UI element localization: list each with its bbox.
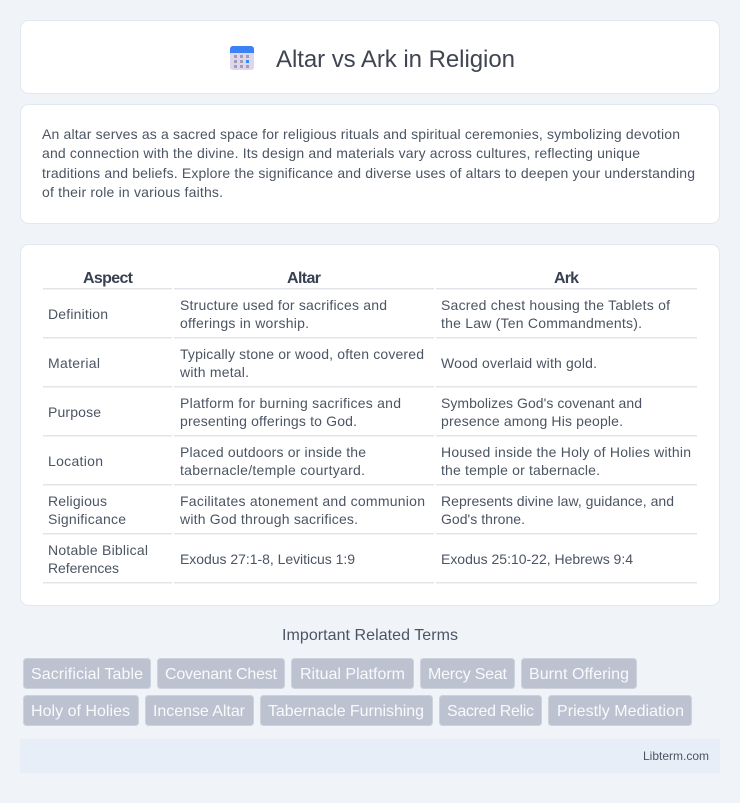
intro text: traditions and beliefs. Explore the significance and diverse uses of altars to deepen your understanding [42, 165, 695, 181]
tag [146, 696, 254, 726]
row: religious significance: Religious [48, 493, 107, 509]
row: location: the temple or tabernacle. [441, 462, 600, 478]
table [43, 270, 697, 584]
tag: Covenant Chest [165, 666, 278, 683]
row: location: tabernacle/temple courtyard. [180, 462, 365, 478]
row: location: Location [48, 453, 103, 469]
related terms tags [24, 658, 692, 726]
tag [548, 696, 692, 726]
row: purpose: Purpose [48, 404, 101, 420]
row: definition: Sacred chest housing the Tablets of [441, 297, 670, 313]
row: material: Typically stone or wood, often covered [180, 346, 424, 362]
tag [522, 658, 636, 688]
tag: Mercy Seat [428, 666, 508, 683]
row: location [48, 444, 691, 478]
row: material: Material [48, 355, 100, 371]
row: notable biblical references: Exodus 25:10-22, Hebrews 9:4 [441, 551, 633, 567]
intro text [42, 126, 695, 200]
row: definition [48, 297, 670, 331]
tag: Holy of Holies [31, 703, 130, 720]
row: religious significance: Significance [48, 511, 126, 527]
row: religious significance: Represents divine law, guidance, and [441, 493, 674, 509]
row: purpose: Symbolizes God's covenant and [441, 395, 642, 411]
row: location: Placed outdoors or inside the [180, 444, 366, 460]
row: purpose: presenting offerings to God. [180, 413, 357, 429]
footer credit: Libterm.com [643, 749, 709, 763]
row: material: with metal. [179, 364, 249, 380]
tag [24, 658, 150, 688]
tag [260, 696, 432, 726]
tag: Incense Altar [153, 703, 246, 720]
table card [20, 244, 720, 606]
table header [83, 270, 579, 287]
tag: Priestly Mediation [557, 703, 684, 720]
row: notable biblical references [48, 542, 633, 576]
footer [20, 739, 720, 773]
row: religious significance [48, 493, 674, 527]
tag: Sacrificial Table [31, 666, 143, 683]
tag [292, 658, 414, 688]
row: religious significance: Facilitates atonement and communion [180, 493, 425, 509]
intro card [20, 104, 720, 224]
row: material [48, 346, 597, 380]
icon: calendar [230, 46, 254, 70]
row: notable biblical references: Exodus 27:1-8, Leviticus 1:9 [180, 551, 355, 567]
row: material: Wood overlaid with gold. [441, 355, 597, 371]
tag [158, 658, 284, 688]
row: location: Housed inside the Holy of Holies within [441, 444, 691, 460]
tag [440, 696, 542, 726]
row: notable biblical references: References [48, 560, 119, 576]
row: definition: Definition [48, 306, 108, 322]
row: purpose [48, 395, 642, 429]
intro text: An altar serves as a sacred space for religious rituals and spiritual ceremonies, symbolizing devotion [42, 126, 680, 142]
related terms heading: Important Related Terms [282, 627, 458, 644]
table header: Ark [554, 270, 579, 287]
table header: Aspect [83, 270, 134, 287]
tag: Burnt Offering [529, 666, 629, 683]
row: purpose: presence among His people. [441, 413, 623, 429]
header card [20, 20, 720, 94]
tag: Sacred Relic [447, 703, 534, 720]
row: religious significance: God's throne. [441, 511, 525, 527]
row: definition: the Law (Ten Commandments). [441, 315, 642, 331]
tag [420, 658, 514, 688]
row: definition: Structure used for sacrifices and [180, 297, 387, 313]
intro text: of their role in various faiths. [42, 184, 223, 200]
row: notable biblical references: Notable Biblical [48, 542, 148, 558]
tag: Ritual Platform [300, 666, 405, 683]
row: purpose: Platform for burning sacrifices and [180, 395, 401, 411]
row: religious significance: with God through sacrifices. [179, 511, 358, 527]
row: definition: offerings in worship. [180, 315, 309, 331]
table header: Altar [287, 270, 321, 287]
tag: Tabernacle Furnishing [268, 703, 424, 720]
title: Altar vs Ark in Religion [276, 46, 515, 73]
intro text: and connection with the divine. Its design and materials vary across cultures, reflecting unique [42, 145, 640, 161]
tag [24, 696, 138, 726]
